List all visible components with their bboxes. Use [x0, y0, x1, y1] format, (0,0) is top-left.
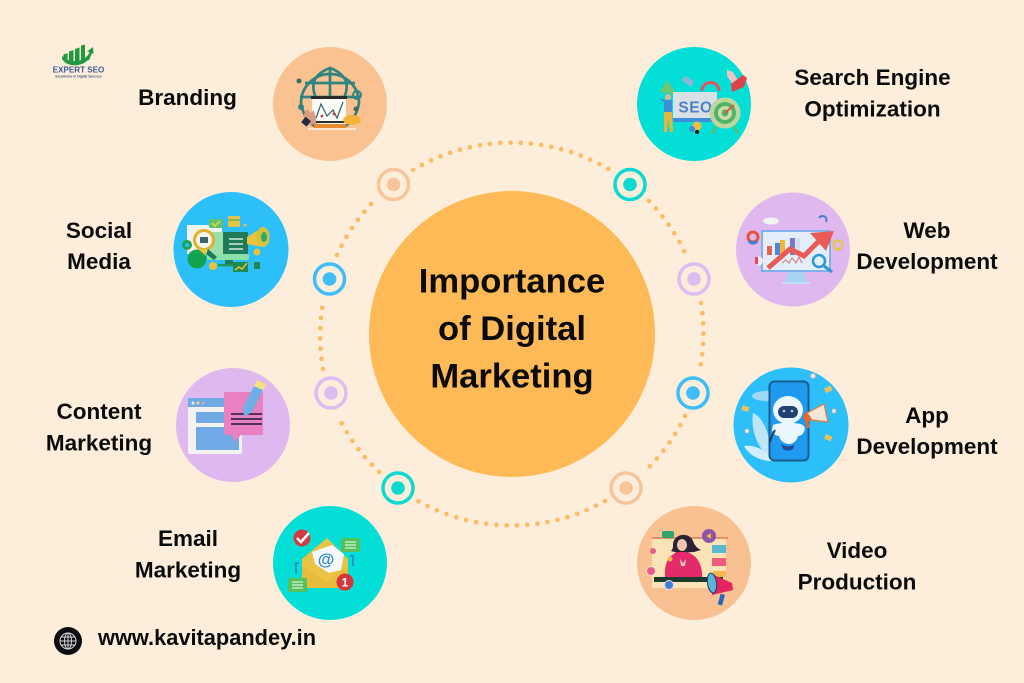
center circle with title: Importance: [419, 262, 605, 300]
target marker: blue left: [314, 264, 344, 294]
logo: Expert SEO: Excellence in Digital Success: [55, 74, 102, 78]
target marker: lilac right: [679, 264, 709, 294]
item: App Development: [734, 368, 998, 482]
icon: analytics monitor: [748, 216, 842, 284]
label: Search Engine Optimization: Optimization: [804, 96, 941, 122]
target marker: lilac left: [316, 378, 346, 408]
label: App Development: App: [905, 403, 949, 428]
icon: SEO board with target: SEO: [678, 100, 713, 116]
item: Social Media: [66, 192, 288, 307]
item: Branding: [138, 47, 387, 161]
item: Email Marketing: [135, 506, 387, 620]
target marker: peach bottom right: [611, 473, 641, 503]
icon circle: Email Marketing: [273, 506, 387, 620]
dotted ring: [320, 143, 703, 525]
target marker: teal top right: [615, 170, 645, 200]
label: Web Development: Web: [903, 218, 951, 243]
center circle with title: Marketing: [430, 358, 594, 396]
target marker: peach top left: [378, 170, 408, 200]
icon: robot on phone: [736, 373, 848, 461]
website footer: [54, 625, 316, 655]
icon circle: Content Marketing: [176, 368, 290, 482]
label: Web Development: Development: [856, 249, 998, 274]
label: Video Production: Production: [798, 570, 916, 594]
label: Social Media: Social: [66, 218, 132, 243]
label: Content Marketing: Content: [57, 399, 142, 424]
icon: social media monitor and megaphone: [182, 216, 270, 272]
icon: video presenter: [646, 529, 733, 605]
label: Branding: Branding: [138, 85, 237, 110]
label: Content Marketing: Marketing: [46, 430, 152, 456]
item: Search Engine Optimization: [637, 47, 951, 161]
icon: browser window and note: [188, 380, 266, 454]
label: Social Media: Media: [67, 249, 131, 274]
item: Video Production: [637, 506, 916, 620]
icon: SEO board with target: [660, 70, 747, 134]
icon: globe badge: [54, 627, 82, 655]
icon circle: Branding: [273, 47, 387, 161]
website address: www.kavitapandey.in: [97, 625, 316, 650]
label: Search Engine Optimization: Search Engine: [794, 65, 951, 90]
center circle with title: [369, 191, 655, 477]
icon: envelope: @: [318, 550, 334, 569]
label: Email Marketing: Marketing: [135, 558, 241, 582]
icon circle: Web Development: [736, 192, 850, 306]
icon: globe with chart: [296, 68, 361, 130]
icon circle: SEO: [637, 47, 751, 161]
logo: Expert SEO: [53, 44, 104, 78]
label: Email Marketing: Email: [158, 526, 218, 551]
icon: envelope: [288, 530, 360, 592]
target marker: teal bottom left: [383, 473, 413, 503]
center circle with title: of Digital: [438, 310, 586, 348]
logo: Expert SEO: EXPERT SEO: [53, 66, 104, 74]
item: Content Marketing: [46, 368, 290, 482]
target marker: blue right: [678, 378, 708, 408]
icon: envelope: 1: [342, 576, 349, 590]
icon circle: Video Production: [637, 506, 751, 620]
label: Video Production: Video: [827, 538, 887, 563]
icon circle: Social Media: [174, 192, 288, 307]
label: App Development: Development: [856, 434, 998, 459]
item: Web Development: [736, 192, 998, 306]
icon circle: App Development: [734, 368, 848, 482]
